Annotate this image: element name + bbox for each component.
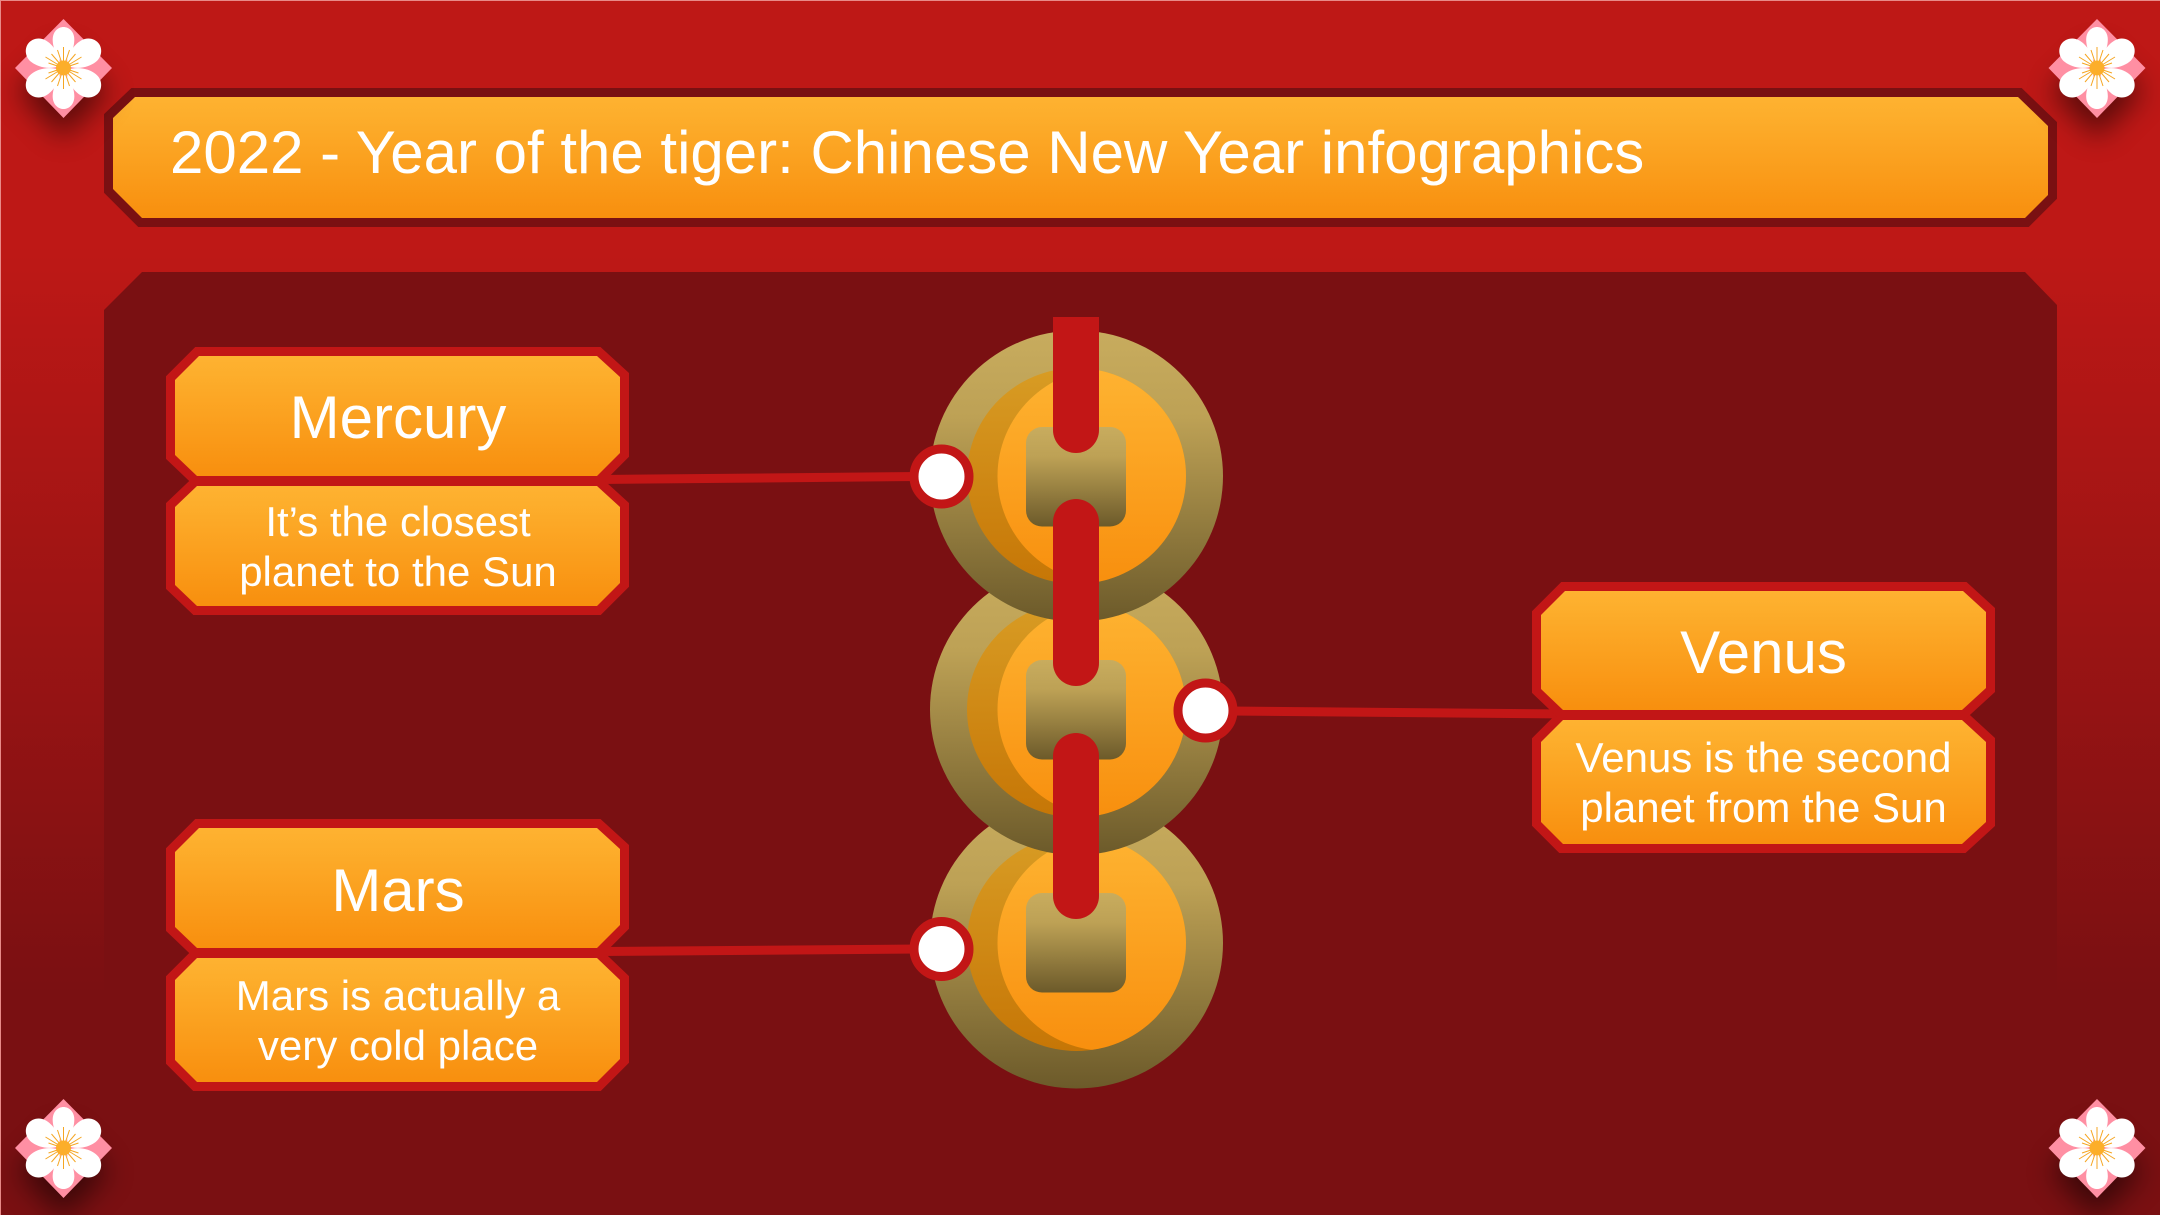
flower: bottom left bbox=[15, 1099, 112, 1215]
description: Mercury: planet to the Sun bbox=[239, 548, 557, 595]
description: Mars: very cold place bbox=[258, 1022, 538, 1069]
card: Mars bbox=[175, 828, 620, 1082]
connector: Mercury bbox=[600, 476, 920, 480]
connector: Mars bbox=[600, 949, 920, 952]
description: Mars: Mars is actually a bbox=[236, 972, 561, 1019]
connector: Venus bbox=[1230, 711, 1570, 714]
coin 1 bbox=[930, 330, 1223, 622]
title banner bbox=[113, 97, 2048, 218]
ribbon 3 bbox=[1053, 733, 1099, 919]
coin 2 bbox=[930, 592, 1220, 854]
coin 3 bbox=[932, 826, 1223, 1088]
card: Venus bbox=[1541, 591, 1986, 844]
flower: top right bbox=[2048, 19, 2146, 138]
heading: Mars: Mars bbox=[331, 857, 465, 924]
ribbon 2 bbox=[1053, 499, 1099, 686]
description: Venus: Venus is the second bbox=[1576, 734, 1951, 781]
description: Venus: planet from the Sun bbox=[1580, 784, 1947, 831]
heading: Venus: Venus bbox=[1680, 619, 1847, 686]
marker: Mars bbox=[914, 922, 969, 976]
marker: Venus bbox=[1178, 683, 1233, 738]
heading: Mercury: Mercury bbox=[290, 384, 506, 451]
title: 2022 - Year of the tiger: Chinese New Year infographics bbox=[170, 119, 1644, 186]
panel: main dark area bbox=[104, 272, 2057, 1215]
ribbon 1 bbox=[1053, 317, 1099, 453]
marker: Mercury bbox=[914, 449, 969, 504]
flower: top left bbox=[15, 19, 112, 138]
flower: bottom right bbox=[2048, 1099, 2146, 1215]
card: Mercury bbox=[175, 356, 620, 606]
description: Mercury: It’s the closest bbox=[265, 498, 531, 545]
